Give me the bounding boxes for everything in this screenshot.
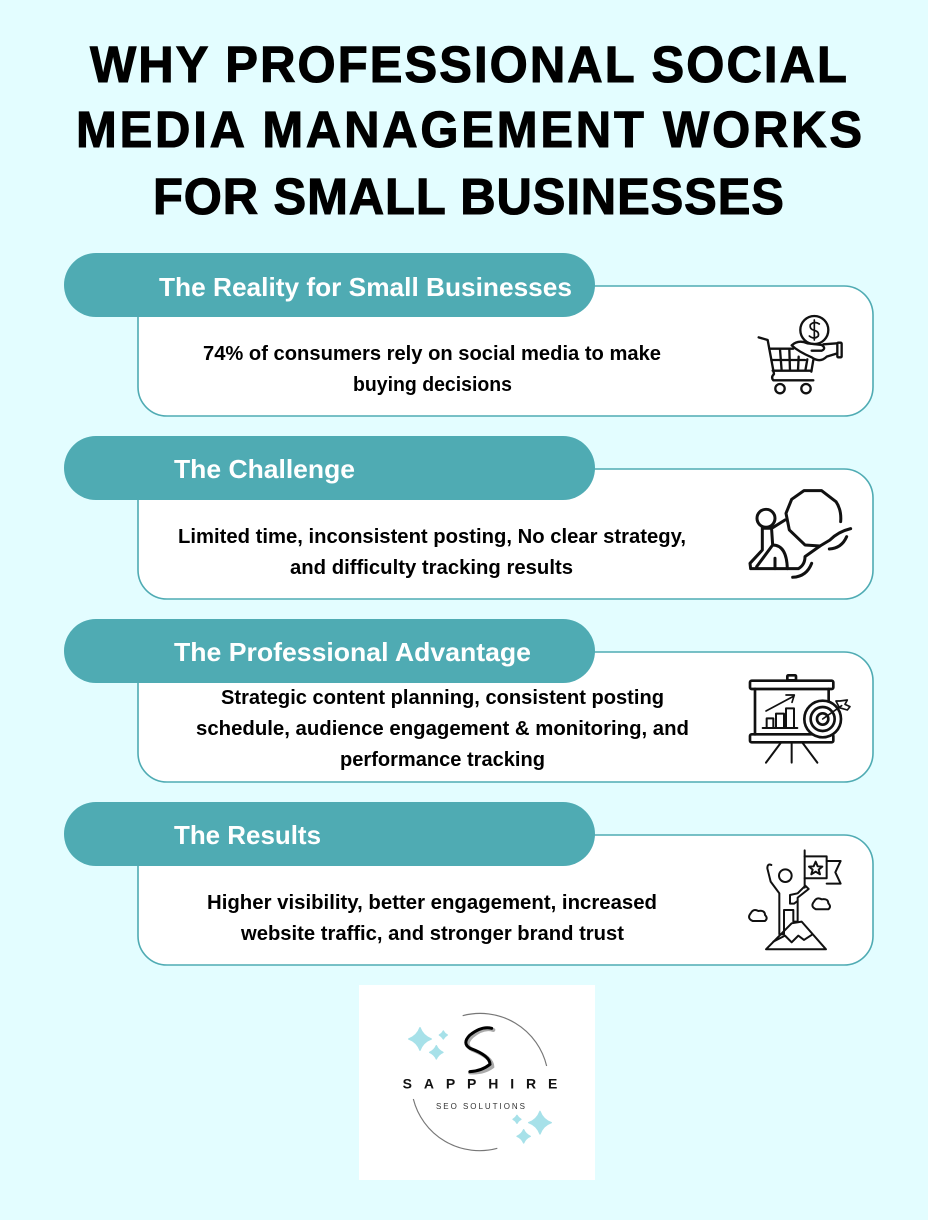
body text: performance tracking (340, 749, 545, 771)
logo S mark (466, 1028, 493, 1072)
logo tagline: SEO SOLUTIONS (436, 1102, 525, 1111)
heading pill (64, 802, 595, 866)
body text: website traffic, and stronger brand trust (240, 923, 624, 945)
heading pill (64, 436, 595, 500)
card (138, 652, 873, 782)
heading pill (64, 253, 595, 317)
heading pill: The Results (174, 820, 321, 850)
logo sparkles (409, 1028, 551, 1143)
panel: the results (64, 802, 873, 965)
heading pill: The Reality for Small Businesses (159, 272, 572, 302)
body text: 74% of consumers rely on social media to make (203, 343, 661, 365)
body text (178, 526, 686, 579)
body text: Higher visibility, better engagement, increased (207, 892, 657, 914)
title: WHY PROFESSIONAL SOCIAL (90, 36, 847, 93)
heading pill: The Professional Advantage (174, 637, 531, 667)
body text: schedule, audience engagement & monitoring, and (196, 718, 689, 740)
card (138, 469, 873, 599)
panel: the professional advantage (64, 619, 873, 782)
title: MEDIA MANAGEMENT WORKS (76, 101, 862, 158)
title (76, 36, 862, 225)
logo: Sapphire SEO Solutions (359, 985, 595, 1180)
body text: Limited time, inconsistent posting, No clear strategy, (178, 526, 686, 548)
body text (203, 343, 661, 396)
icon: shopping cart with hand and coin (759, 316, 842, 393)
body text: buying decisions (353, 374, 512, 396)
panel: the challenge (64, 436, 873, 599)
body text: Strategic content planning, consistent posting (221, 687, 664, 709)
panel: the reality for small businesses (64, 253, 873, 416)
icon: person with flag on mountain (749, 850, 841, 949)
body text (196, 687, 689, 771)
icon: presentation board with chart and target (750, 675, 850, 763)
heading pill (64, 619, 595, 683)
heading pill: The Challenge (174, 454, 355, 484)
logo ring arcs (413, 1013, 547, 1151)
title: FOR SMALL BUSINESSES (153, 168, 784, 225)
body text: and difficulty tracking results (290, 557, 573, 579)
body text (207, 892, 657, 945)
card (138, 835, 873, 965)
card (138, 286, 873, 416)
icon: person pushing boulder uphill (750, 491, 851, 577)
logo wordmark: SAPPHIRE (403, 1075, 557, 1091)
